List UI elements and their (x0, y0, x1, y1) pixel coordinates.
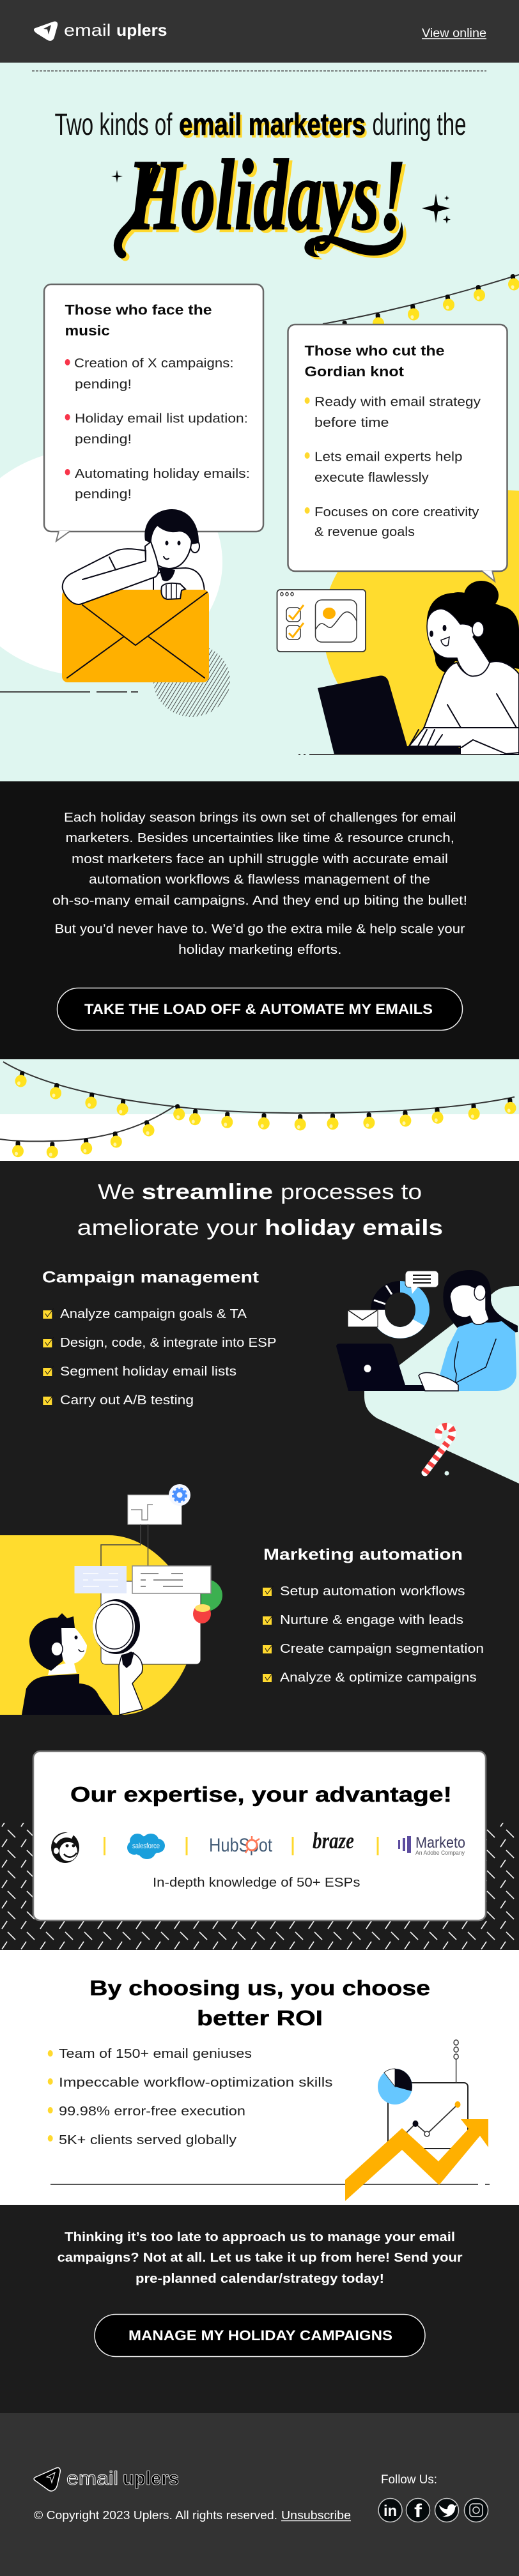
expertise card (33, 1751, 486, 1920)
diamond plate background (0, 1823, 519, 1950)
button: manage campaigns: MANAGE MY HOLIDAY CAMPAIGNS (128, 2327, 392, 2343)
list: pending items: pending! (75, 378, 132, 392)
list: ready items: & revenue goals (314, 525, 415, 539)
mint shape (364, 1286, 519, 1483)
line chart (407, 2101, 460, 2136)
second paragraph: holiday marketing efforts. (178, 943, 341, 957)
checklist: campaign management: Carry out A/B testing (60, 1393, 194, 1407)
sweater (409, 661, 519, 755)
heading: better ROI: better ROI (197, 2006, 323, 2030)
icon: linkedin (378, 2498, 402, 2522)
ear (51, 1642, 63, 1656)
ear (472, 622, 484, 637)
heading: better ROI (89, 1976, 430, 2030)
checklist: campaign management (43, 1307, 277, 1407)
ground line right (298, 754, 500, 755)
logo: email uplers: uplers (116, 20, 167, 40)
button: manage campaigns (95, 2314, 425, 2356)
footer logo (34, 2467, 179, 2491)
panel: closing call to action (0, 2205, 519, 2413)
icon: facebook (407, 2498, 430, 2522)
red circle (193, 1604, 211, 1623)
icon: linkedin: in (383, 2503, 397, 2520)
heading: we streamline: holiday emails (265, 1216, 443, 1240)
list: ready items: before time (314, 416, 389, 430)
logo: salesforce (127, 1834, 165, 1859)
title line: during the (372, 108, 467, 142)
bulbs (12, 1070, 516, 1158)
button: automate (58, 988, 463, 1030)
logo: marketo (398, 1834, 465, 1857)
icon: checklist chart card (277, 590, 366, 652)
list: ready items: execute flawlessly (314, 471, 429, 485)
heading left: music (65, 323, 110, 339)
sweater details (409, 694, 519, 754)
collar (159, 567, 175, 581)
list: pending items: Holiday email list updation: (75, 412, 248, 426)
list: ready items: Lets email experts help (314, 450, 463, 464)
title line: email marketers (179, 108, 366, 142)
hatched circle (153, 644, 230, 717)
eye and smile (74, 1636, 84, 1652)
ear (190, 540, 199, 553)
white blob behind man (0, 448, 222, 676)
heading: we streamline: ameliorate your (77, 1216, 258, 1240)
second paragraph (55, 923, 465, 957)
closing text: Thinking it’s too late to approach us to manage your email (65, 2230, 455, 2244)
list: pending items: pending! (75, 487, 132, 502)
face and neck (427, 609, 490, 676)
list: ready items: Focuses on core creativity (314, 505, 479, 519)
heading left: Those who face the (65, 302, 212, 318)
checklist: marketing automation: Analyze & optimize campaigns (280, 1671, 477, 1685)
heading: marketing automation: Marketing automation (263, 1546, 463, 1564)
list: benefits: 5K+ clients served globally (59, 2133, 236, 2147)
hair (29, 1613, 75, 1671)
blue top lines (454, 1339, 496, 1388)
ground line left (0, 691, 138, 693)
logo: email uplers (34, 20, 167, 41)
connector lines (101, 1524, 148, 1581)
logo: braze: braze (313, 1828, 354, 1853)
heading: better ROI: By choosing us, you choose (89, 1976, 430, 2000)
panel: string lights divider (0, 1059, 519, 1161)
icon: candy cane (425, 1426, 453, 1473)
neck (48, 1661, 77, 1675)
laptop (318, 675, 461, 755)
intro paragraph (52, 811, 467, 908)
checklist: campaign management: Segment holiday email lists (60, 1365, 236, 1379)
logo: hubspot: HubSpot (209, 1835, 273, 1856)
checklist: marketing automation (263, 1584, 484, 1685)
icon: twitter (435, 2498, 459, 2522)
antenna with dots (454, 2040, 458, 2083)
pie chart (378, 2069, 412, 2104)
list: pending items: Automating holiday emails: (75, 467, 250, 481)
bubble tail left (56, 531, 70, 541)
closing text: campaigns? Not at all. Let us take it up from here! Send your (58, 2251, 463, 2265)
illustration: man leaning on envelope (62, 509, 209, 682)
checklist: campaign management: Design, code, & integrate into ESP (60, 1336, 277, 1350)
orange arrow (345, 2119, 488, 2201)
panel: those who face the music (44, 284, 263, 541)
heading: we streamline: processes to (281, 1180, 422, 1204)
yellow shape (0, 1535, 195, 1715)
intro paragraph: marketers. Besides uncertainties like time & resource crunch, (65, 831, 454, 845)
yellow blob behind woman (323, 490, 519, 755)
footer logo: uplers (123, 2468, 179, 2489)
face (61, 1628, 87, 1664)
heading: our expertise: Our expertise, your advantage! (70, 1782, 452, 1806)
title line: Two kinds of (55, 108, 173, 142)
intro paragraph: Each holiday season brings its own set of challenges for email (64, 811, 456, 825)
list: pending items (65, 356, 250, 502)
follow us label: Follow Us: (381, 2473, 437, 2487)
list: benefits: 99.98% error-free execution (59, 2104, 245, 2119)
social icons (378, 2498, 488, 2522)
panel: our expertise (0, 1751, 519, 1950)
checklist: marketing automation: Create campaign segmentation (280, 1642, 484, 1656)
intro paragraph: most marketers face an uphill struggle with accurate email (72, 852, 448, 866)
blue top (435, 1321, 516, 1391)
bun (464, 581, 499, 610)
caption: 50+ ESPs: In-depth knowledge of 50+ ESPs (153, 1876, 360, 1890)
string lights top right (323, 273, 519, 337)
chart device (388, 2083, 468, 2149)
arm (63, 542, 159, 604)
logo: email uplers: email (64, 20, 111, 40)
board (101, 1581, 201, 1664)
hero panel (0, 63, 519, 781)
green circle (189, 1579, 222, 1611)
hand (419, 1372, 458, 1391)
title line (55, 108, 467, 144)
script title: Holidays! (118, 139, 409, 259)
footer logo: email (66, 2468, 118, 2489)
bubble tail right (481, 571, 495, 581)
eyes and mouth (430, 625, 449, 646)
panel: dark intro (0, 781, 519, 1059)
arm (119, 1652, 143, 1715)
heading: we streamline (77, 1180, 443, 1240)
title line: email marketers (181, 111, 368, 144)
illustration: man with magnifier (0, 1484, 222, 1715)
heading right (304, 343, 445, 379)
hair (443, 1270, 518, 1335)
magnifier (93, 1599, 140, 1668)
face (150, 521, 192, 569)
dividers (104, 1837, 378, 1855)
ear (474, 1285, 486, 1300)
illustration: growth chart (345, 2040, 488, 2201)
donut chart (371, 1281, 430, 1338)
footer (0, 2413, 519, 2576)
hand on envelope (161, 583, 185, 599)
logo: marketo: Marketo (415, 1834, 465, 1851)
icon: facebook: f (414, 2501, 422, 2522)
list: pending items: Creation of X campaigns: (74, 356, 234, 371)
facial features (164, 540, 180, 559)
blue note card (74, 1566, 127, 1593)
illustration: woman at laptop with donut chart (336, 1270, 519, 1483)
chat bubble icon (405, 1271, 438, 1294)
heading: we streamline: We (98, 1180, 135, 1204)
workflow card with gear (128, 1484, 190, 1524)
closing text (58, 2230, 463, 2286)
list: pending items: pending! (75, 433, 132, 447)
envelope (62, 590, 209, 682)
view online link: View online (422, 27, 486, 40)
laptop (336, 1344, 447, 1391)
button: automate: TAKE THE LOAD OFF & AUTOMATE MY EMAILS (84, 1001, 433, 1017)
heading right: Those who cut the (304, 343, 445, 359)
heading left (65, 302, 212, 339)
list: benefits (48, 2047, 332, 2147)
second paragraph: But you’d never have to. We’d go the extra mile & help scale your (55, 923, 465, 937)
list: ready items: Ready with email strategy (314, 395, 481, 410)
panel: choosing us (0, 1950, 519, 2205)
panel: those who cut the gordian knot (288, 325, 507, 581)
list: benefits: Team of 150+ email geniuses (59, 2047, 252, 2061)
heading: campaign management: Campaign management (42, 1269, 260, 1287)
list: ready items (305, 395, 481, 539)
hair (144, 509, 199, 544)
list: benefits: Impeccable workflow-optimization skills (59, 2076, 332, 2090)
overlap highlight (195, 1604, 210, 1612)
envelope icon (348, 1310, 378, 1327)
sparkles (111, 170, 451, 224)
ground line (50, 2184, 490, 2185)
panel: streamline services (0, 1161, 519, 1950)
intro paragraph: automation workflows & flawless management of the (89, 873, 430, 887)
intro paragraph: oh-so-many email campaigns. And they end up biting the bullet! (52, 894, 467, 908)
icon: instagram (464, 2498, 488, 2522)
checklist: marketing automation: Nurture & engage with leads (280, 1613, 463, 1627)
man torso (153, 568, 205, 594)
hair (427, 592, 519, 673)
wires (0, 1062, 515, 1141)
copyright: © Copyright 2023 Uplers. All rights reserved. (34, 2508, 277, 2522)
checklist: campaign management: Analyze campaign goals & TA (60, 1307, 247, 1321)
body (22, 1674, 112, 1715)
heading right: Gordian knot (304, 364, 405, 379)
header bar (0, 0, 519, 63)
copyright: Unsubscribe (281, 2508, 351, 2522)
logo: mailchimp (51, 1832, 79, 1863)
checklist: marketing automation: Setup automation workflows (280, 1584, 465, 1598)
illustration: happy woman with laptop (298, 581, 519, 755)
logo: salesforce: salesforce (132, 1841, 160, 1850)
white note card (132, 1566, 211, 1593)
closing text: pre-planned calendar/strategy today! (136, 2272, 384, 2286)
logo: marketo: An Adobe Company (415, 1850, 465, 1857)
snow dot (445, 1471, 449, 1476)
heading: we streamline: streamline (142, 1180, 273, 1204)
face (450, 1285, 489, 1324)
